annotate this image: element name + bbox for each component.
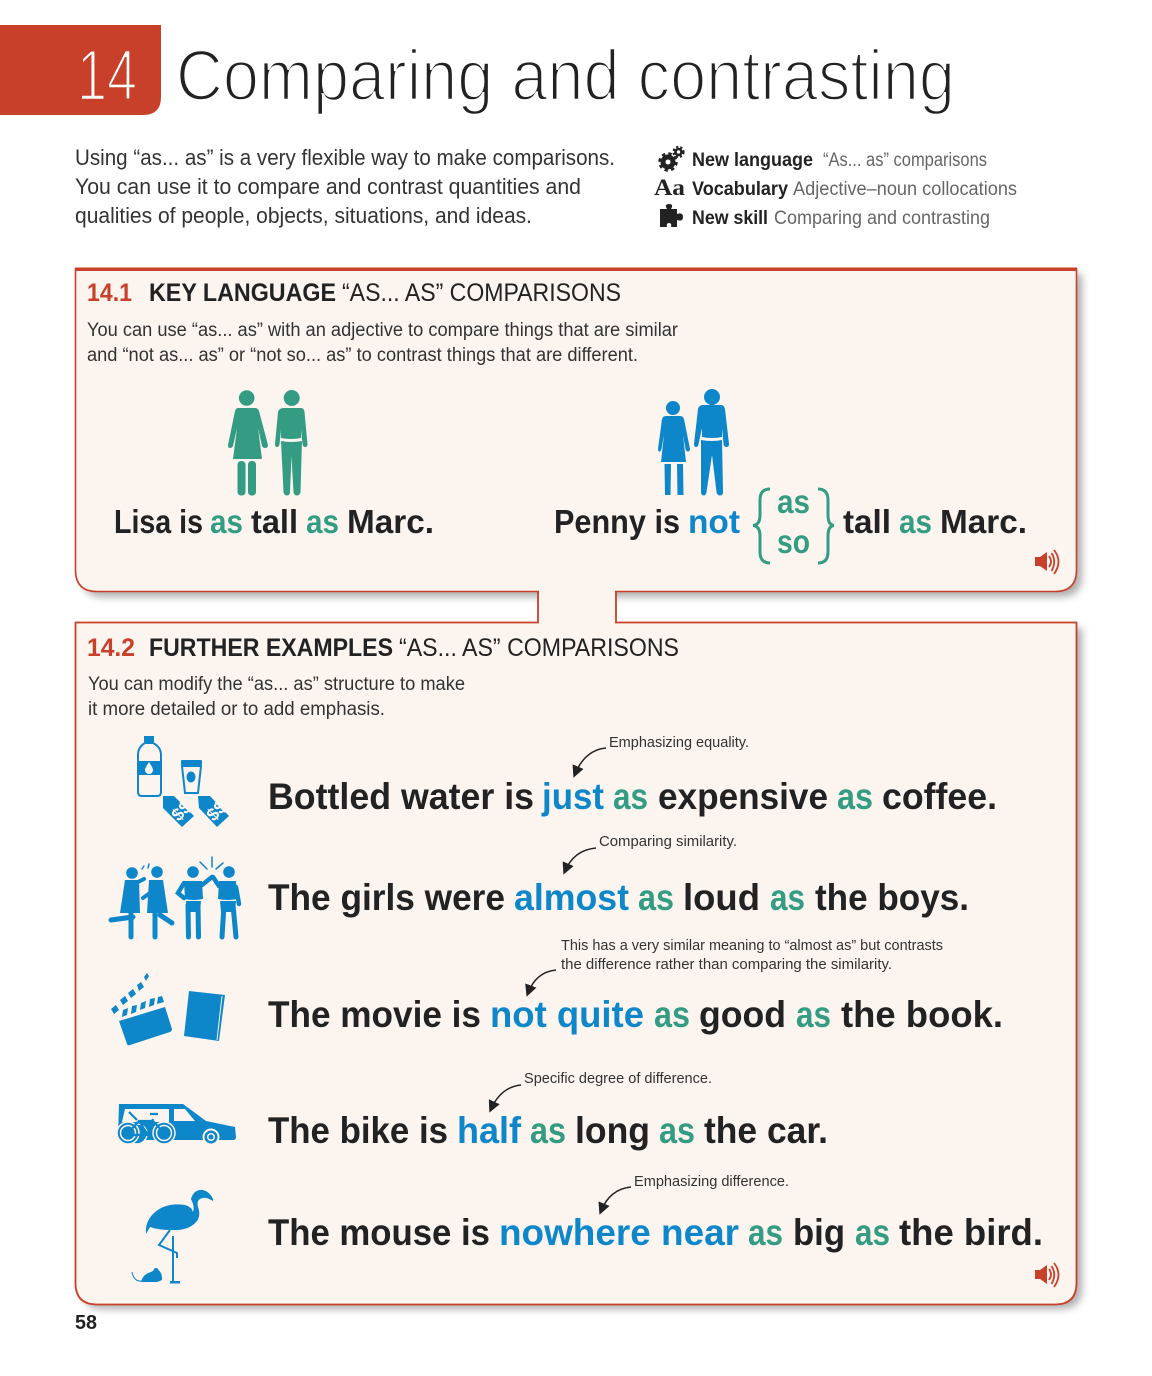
annotation: specific degree: Specific degree of difference.	[524, 1071, 712, 1087]
annotation: emphasizing difference: Emphasizing difference.	[634, 1174, 789, 1190]
sentence: movie and book: not quite	[490, 994, 644, 1035]
sentence: mouse and bird: as	[855, 1212, 890, 1253]
icon: puzzle piece	[660, 204, 683, 227]
brace: as / so options	[753, 483, 834, 563]
annotation: comparing similarity: Comparing similarity.	[599, 834, 737, 850]
annotation: emphasizing equality	[575, 735, 749, 774]
heading 14.1: KEY LANGUAGE	[149, 279, 336, 307]
brace: as / so options: as	[777, 483, 810, 520]
sentence: Penny is not as/so tall as Marc.: not	[688, 503, 740, 540]
sentence: bottled water: Bottled water is	[268, 776, 534, 817]
sentence: Lisa is as tall as Marc.: Lisa is	[114, 503, 203, 540]
icon: audio speaker	[1035, 550, 1058, 574]
annotation: contrasting difference: the difference rather than comparing the similarity.	[561, 957, 892, 973]
description 14.2: it more detailed or to add emphasis.	[88, 699, 385, 720]
sentence: bike and car: long	[575, 1110, 650, 1151]
heading 14.2	[87, 634, 679, 662]
learning points: New language	[692, 150, 813, 171]
chapter number badge	[0, 25, 161, 116]
sentence: girls and boys: almost	[514, 877, 629, 918]
sentence: bottled water: expensive	[658, 776, 828, 817]
panel: 14.1 key language	[75, 268, 1077, 592]
intro text: qualities of people, objects, situations, and ideas.	[75, 203, 532, 228]
sentence: bike and car: The bike is	[268, 1110, 448, 1151]
panel 14.2 shadow	[82, 628, 1082, 1309]
icon: vocabulary Aa: Aa	[654, 175, 686, 200]
description 14.2	[88, 674, 465, 720]
learning points: “As... as” comparisons	[823, 150, 987, 171]
intro text	[75, 145, 615, 228]
annotation: emphasizing equality: Emphasizing equality.	[609, 735, 749, 751]
sentence: mouse and bird: nowhere near	[499, 1212, 739, 1253]
sentence: Lisa is as tall as Marc.: Marc.	[347, 503, 434, 540]
sentence: bike and car	[268, 1110, 828, 1151]
heading 14.1: 14.1	[87, 279, 132, 307]
panel 14.1 shadow	[82, 274, 1082, 597]
sentence: Penny is not as/so tall as Marc.: as	[899, 503, 932, 540]
sentence: bottled water: as	[613, 776, 648, 817]
icon: clapperboard and book	[111, 973, 225, 1045]
description 14.1: You can use “as... as” with an adjective to compare things that are similar	[87, 320, 679, 341]
annotation: specific degree	[491, 1071, 712, 1109]
sentence: bike and car: half	[457, 1110, 522, 1151]
sentence: Penny is not as/so tall as Marc.: Marc.	[940, 503, 1027, 540]
icon: bottled water and coffee price tags: $$	[167, 797, 196, 825]
sentence: girls and boys: the boys.	[815, 877, 969, 918]
sentence: Lisa is as tall as Marc.	[114, 503, 434, 540]
icon: bike and car	[117, 1104, 236, 1144]
learning points: Adjective–noun collocations	[793, 179, 1017, 200]
sentence: mouse and bird	[268, 1212, 1043, 1253]
intro text: You can use it to compare and contrast quantities and	[75, 174, 581, 199]
icon: Penny and Marc, different height	[658, 389, 729, 496]
sentence: bike and car: the car.	[704, 1110, 828, 1151]
sentence: bottled water: as	[837, 776, 873, 817]
sentence: movie and book: good	[699, 994, 786, 1035]
icon: audio speaker	[1035, 1263, 1058, 1287]
sentence: girls and boys: loud	[683, 877, 760, 918]
sentence: girls and boys	[268, 877, 969, 918]
sentence: movie and book	[268, 994, 1003, 1035]
title: Comparing and contrasting	[176, 37, 955, 116]
sentence: mouse and bird: The mouse is	[268, 1212, 490, 1253]
sentence: movie and book: the book.	[841, 994, 1003, 1035]
sentence: bottled water	[268, 776, 997, 817]
sentence: girls and boys: The girls were	[268, 877, 505, 918]
sentence: bottled water: just	[541, 776, 604, 817]
annotation: contrasting difference	[528, 938, 943, 993]
icon: Lisa and Marc, equal height	[228, 390, 308, 496]
heading 14.2: “AS... AS” COMPARISONS	[399, 634, 679, 662]
sentence: girls and boys: as	[638, 877, 674, 918]
sentence: movie and book: as	[654, 994, 690, 1035]
sentence: movie and book: as	[796, 994, 831, 1035]
sentence: mouse and bird: as	[748, 1212, 783, 1253]
sentence: mouse and bird: big	[793, 1212, 845, 1253]
sentence: movie and book: The movie is	[268, 994, 481, 1035]
icon: bottled water and coffee price tags: $$	[202, 797, 231, 825]
learning points: New skill	[692, 208, 768, 229]
sentence: mouse and bird: the bird.	[899, 1212, 1043, 1253]
learning points	[654, 147, 1017, 229]
annotation: comparing similarity	[565, 834, 737, 871]
icon: gears	[660, 147, 684, 170]
sentence: Penny is not as/so tall as Marc.: tall	[843, 503, 891, 540]
sentence: Lisa is as tall as Marc.: as	[306, 503, 339, 540]
learning points: Vocabulary	[692, 179, 788, 200]
annotation: emphasizing difference	[601, 1174, 789, 1211]
sentence: Penny is not as/so tall as Marc.: Penny is	[554, 503, 680, 540]
sentence: bike and car: as	[659, 1110, 695, 1151]
icon: bottled water and coffee price tags	[138, 736, 231, 827]
annotation: contrasting difference: This has a very similar meaning to “almost as” but contrasts	[561, 938, 943, 954]
description 14.2: You can modify the “as... as” structure to make	[88, 674, 465, 695]
icon: flamingo and mouse	[132, 1190, 213, 1284]
brace: as / so options: so	[777, 523, 810, 560]
sentence: bottled water: coffee.	[882, 776, 997, 817]
page number: 58	[75, 1312, 97, 1334]
icon: girls and boys	[111, 857, 239, 937]
heading 14.2: 14.2	[87, 634, 135, 662]
intro text: Using “as... as” is a very flexible way to make comparisons.	[75, 145, 615, 170]
heading 14.1	[87, 279, 621, 307]
panel: 14.2 further examples	[76, 585, 1076, 1304]
sentence: Lisa is as tall as Marc.: as	[210, 503, 243, 540]
chapter number badge: 14	[77, 36, 137, 116]
sentence: Lisa is as tall as Marc.: tall	[251, 503, 298, 540]
sentence: girls and boys: as	[770, 877, 805, 918]
sentence: Penny is not as/so tall as Marc.	[554, 483, 1027, 563]
learning points: Comparing and contrasting	[774, 208, 990, 229]
heading 14.2: FURTHER EXAMPLES	[149, 634, 393, 662]
sentence: bike and car: as	[530, 1110, 566, 1151]
description 14.1	[87, 320, 679, 366]
description 14.1: and “not as... as” or “not so... as” to contrast things that are different.	[87, 345, 638, 366]
heading 14.1: “AS... AS” COMPARISONS	[342, 279, 621, 307]
